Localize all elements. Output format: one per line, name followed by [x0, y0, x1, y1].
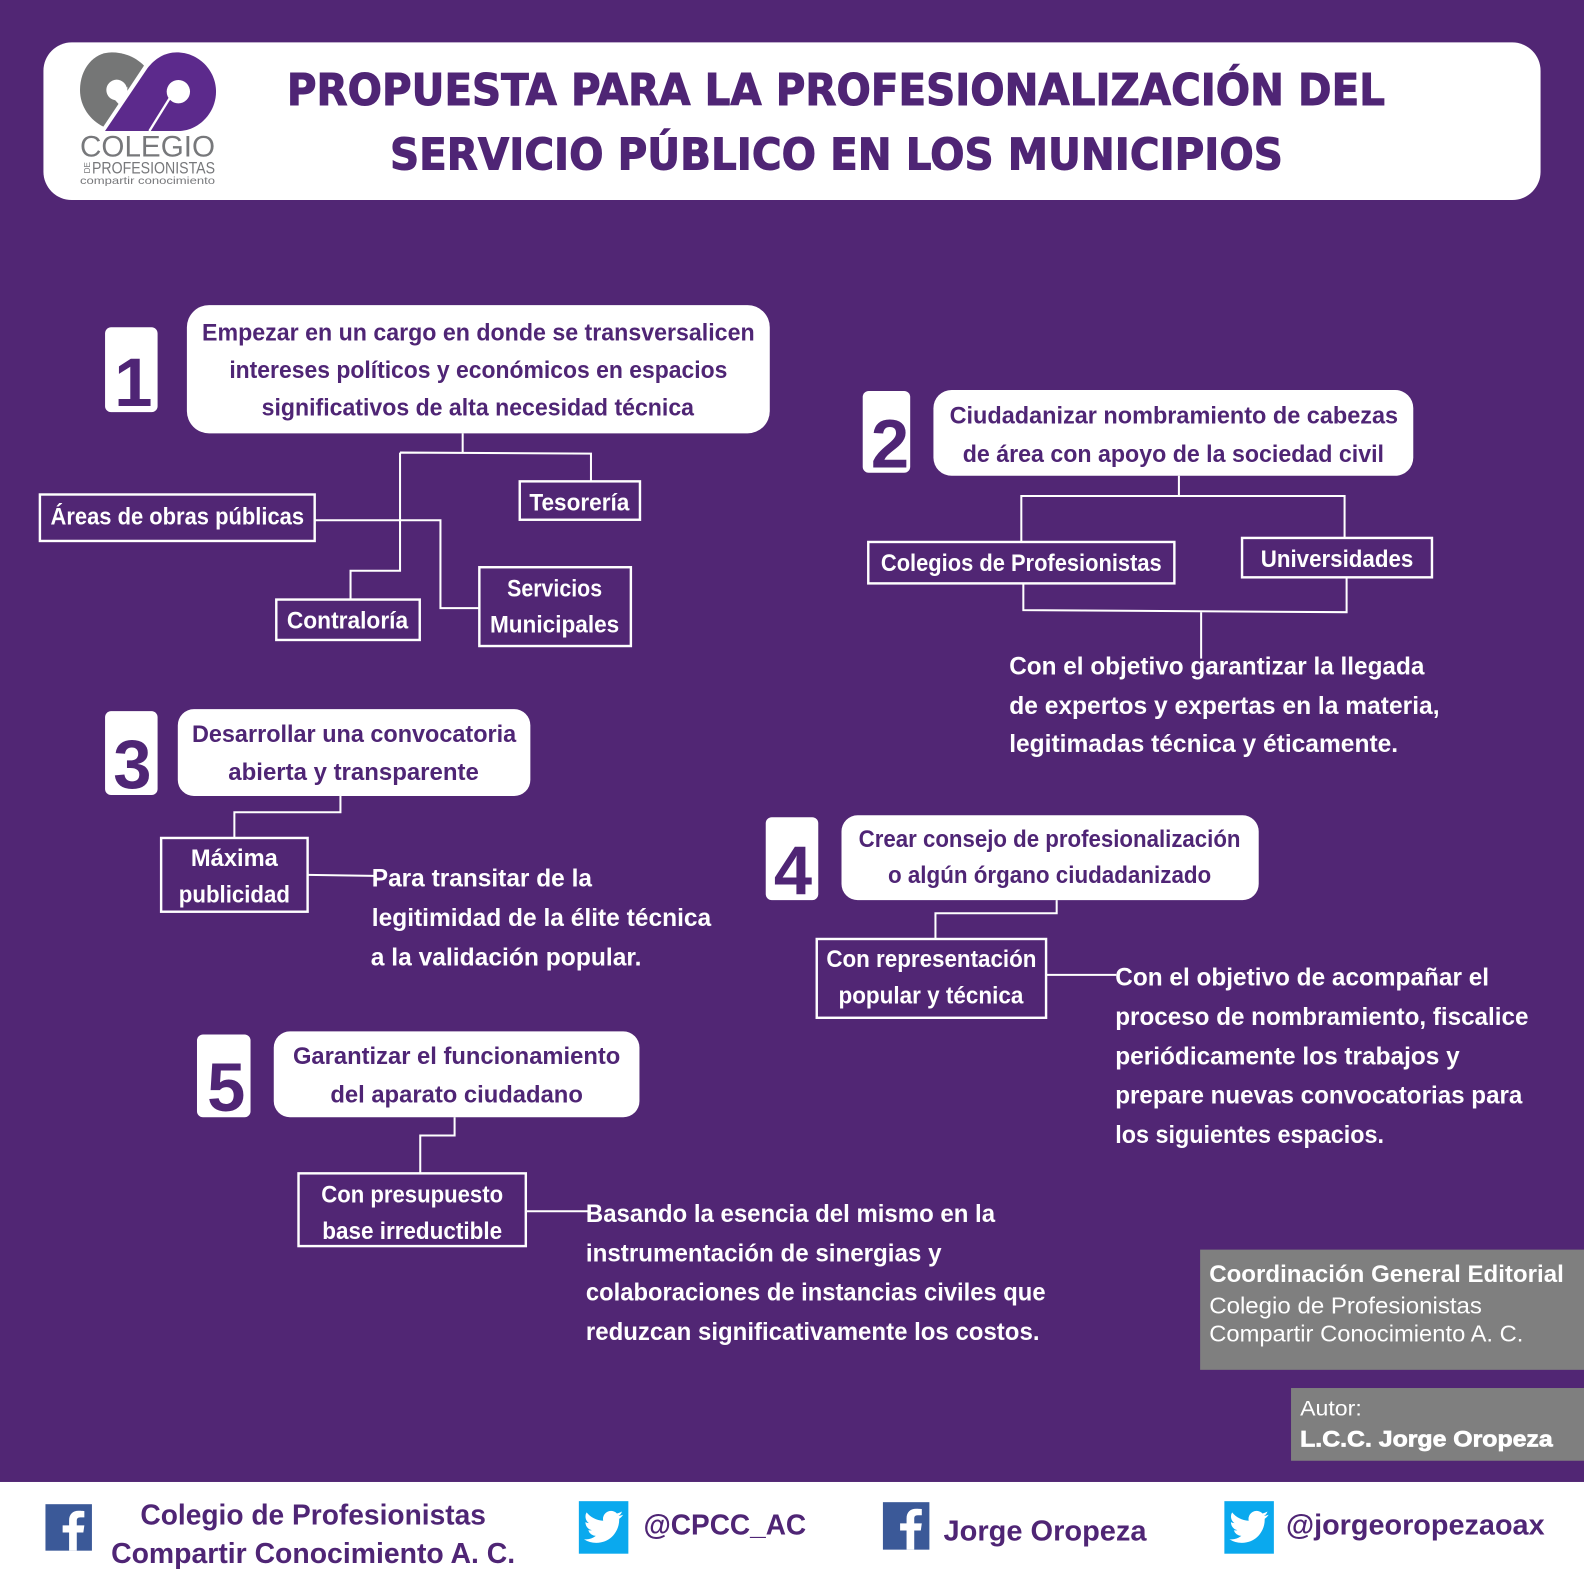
icon: twitter	[579, 1501, 628, 1554]
logo: DE	[82, 162, 92, 173]
number 1	[105, 327, 158, 421]
box: obras públicas: Áreas de obras públicas	[51, 503, 304, 531]
editorial credit: Colegio de Profesionistas	[1209, 1292, 1482, 1318]
box: representación: Con representación	[826, 947, 1036, 973]
box: colegios: Colegios de Profesionistas	[881, 551, 1162, 577]
step 3	[105, 709, 711, 971]
box: presupuesto: Con presupuesto	[321, 1182, 503, 1208]
author credit	[1291, 1388, 1584, 1461]
box: servicios municipales: Municipales	[490, 613, 619, 639]
icon: facebook	[45, 1504, 92, 1551]
heading step 1	[187, 305, 770, 433]
heading step 5	[274, 1031, 639, 1117]
heading step 1: significativos de alta necesidad técnica	[262, 395, 695, 421]
heading step 5: Garantizar el funcionamiento	[293, 1044, 620, 1070]
heading step 3: Desarrollar una convocatoria	[192, 722, 517, 748]
objective text step 2: legitimadas técnica y éticamente.	[1009, 731, 1398, 758]
box: presupuesto: base irreductible	[322, 1219, 502, 1245]
number 3	[105, 711, 158, 803]
heading step 2: de área con apoyo de la sociedad civil	[963, 442, 1384, 468]
step 1	[40, 305, 770, 646]
box: servicios municipales	[479, 567, 631, 646]
heading step 5: del aparato ciudadano	[330, 1082, 583, 1108]
heading step 1: intereses políticos y económicos en espacios	[229, 358, 727, 384]
heading step 4	[842, 815, 1259, 900]
explanatory text step 5: Basando la esencia del mismo en la	[586, 1201, 995, 1228]
box: máxima publicidad: publicidad	[179, 882, 290, 908]
step 4	[766, 815, 1528, 1149]
heading step 2: Ciudadanizar nombramiento de cabezas	[950, 404, 1398, 430]
heading step 3	[178, 709, 530, 796]
title: PROPUESTA PARA LA PROFESIONALIZACIÓN DEL	[287, 65, 1385, 116]
number 5	[197, 1034, 251, 1126]
icon: twitter	[1224, 1501, 1274, 1554]
logo: COLEGIO	[80, 131, 215, 164]
objective text step 2: Con el objetivo garantizar la llegada	[1009, 653, 1425, 680]
editorial credit: Coordinación General Editorial	[1209, 1261, 1564, 1288]
connectors step 2	[1021, 476, 1347, 659]
number 4: 4	[774, 832, 812, 909]
explanatory text step 3	[371, 866, 711, 971]
box: tesorería	[520, 481, 640, 520]
heading step 2	[933, 390, 1413, 476]
explanatory text step 3: legitimidad de la élite técnica	[372, 905, 711, 932]
explanatory text step 4	[1115, 965, 1528, 1149]
step 2	[863, 390, 1440, 758]
title	[287, 65, 1385, 181]
explanatory text step 4: Con el objetivo de acompañar el	[1115, 965, 1489, 992]
number 5: 5	[207, 1049, 245, 1126]
number 1: 1	[114, 344, 152, 421]
heading step 4: Crear consejo de profesionalización	[859, 827, 1241, 853]
explanatory text step 5	[586, 1201, 1046, 1346]
heading step 3: abierta y transparente	[228, 760, 479, 786]
box: obras públicas	[40, 494, 315, 541]
explanatory text step 5: reduzcan significativamente los costos.	[586, 1319, 1039, 1346]
facebook author label: Jorge Oropeza	[944, 1515, 1147, 1547]
box: colegios	[868, 542, 1174, 583]
heading step 1: Empezar en un cargo en donde se transversalicen	[202, 321, 755, 347]
footer	[0, 1482, 1584, 1584]
box: universidades: Universidades	[1261, 547, 1413, 573]
objective text step 2	[1009, 653, 1440, 758]
author credit: Autor:	[1300, 1397, 1362, 1420]
connectors step 5	[420, 1117, 588, 1211]
connectors step 4	[935, 900, 1116, 975]
explanatory text step 4: los siguientes espacios.	[1115, 1122, 1384, 1149]
box: representación	[817, 939, 1046, 1018]
step 5	[197, 1031, 1046, 1346]
explanatory text step 5: instrumentación de sinergias y	[586, 1240, 942, 1267]
connectors step 3	[234, 796, 374, 876]
box: contraloría	[276, 600, 420, 640]
box: máxima publicidad	[161, 838, 308, 912]
box: contraloría: Contraloría	[287, 609, 409, 635]
facebook label	[111, 1498, 515, 1569]
number 4	[766, 817, 818, 909]
logo	[80, 52, 216, 187]
box: representación: popular y técnica	[838, 983, 1024, 1009]
author credit: L.C.C. Jorge Oropeza	[1300, 1427, 1553, 1452]
logo: compartir conocimiento	[80, 176, 215, 187]
heading step 4: o algún órgano ciudadanizado	[888, 863, 1211, 889]
explanatory text step 3: a la validación popular.	[371, 944, 641, 971]
logo: PROFESIONISTAS	[92, 158, 215, 177]
box: universidades	[1242, 538, 1432, 577]
number 2: 2	[871, 406, 909, 483]
twitter author handle: @jorgeoropezaoax	[1286, 1508, 1545, 1540]
explanatory text step 4: prepare nuevas convocatorias para	[1115, 1083, 1523, 1110]
box: servicios municipales: Servicios	[507, 576, 602, 602]
explanatory text step 4: proceso de nombramiento, fiscalice	[1115, 1004, 1528, 1031]
title: SERVICIO PÚBLICO EN LOS MUNICIPIOS	[390, 130, 1283, 181]
icon: facebook	[883, 1502, 929, 1550]
header card	[43, 42, 1541, 200]
editorial credit	[1200, 1250, 1584, 1370]
explanatory text step 3: Para transitar de la	[372, 866, 592, 893]
explanatory text step 4: periódicamente los trabajos y	[1115, 1043, 1460, 1070]
facebook label: Compartir Conocimiento A. C.	[111, 1537, 515, 1569]
editorial credit: Compartir Conocimiento A. C.	[1209, 1321, 1523, 1347]
facebook label: Colegio de Profesionistas	[140, 1498, 486, 1530]
box: máxima publicidad: Máxima	[191, 846, 279, 872]
twitter handle: @CPCC_AC	[643, 1508, 806, 1540]
objective text step 2: de expertos y expertas en la materia,	[1009, 693, 1440, 720]
box: presupuesto	[299, 1173, 526, 1246]
explanatory text step 5: colaboraciones de instancias civiles que	[586, 1280, 1046, 1307]
number 3: 3	[113, 726, 151, 803]
number 2	[863, 391, 910, 483]
connectors step 1	[315, 433, 591, 608]
box: tesorería: Tesorería	[529, 490, 630, 516]
